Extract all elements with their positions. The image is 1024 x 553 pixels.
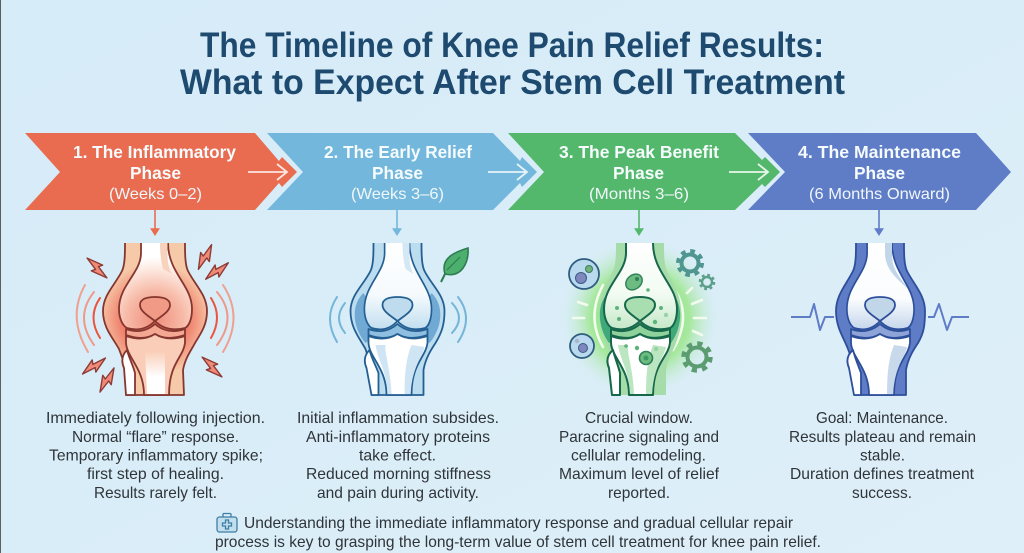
green glow	[558, 236, 722, 400]
icon: early relief knee	[330, 243, 468, 395]
text: phase 4 description: stable.	[860, 448, 905, 464]
text: phase 3 description: Paracrine signaling and	[559, 429, 719, 446]
title	[180, 26, 845, 102]
phase 1 banner: (Weeks 0–2)	[109, 186, 202, 203]
text: phase 2 description	[297, 410, 499, 502]
stem cell lower	[570, 334, 594, 358]
text: phase 4 description: Results plateau and remain	[789, 429, 976, 446]
phase 3 banner: (Months 3–6)	[589, 186, 689, 203]
text: phase 3 description: cellular remodeling.	[571, 448, 706, 464]
stable pulse lines	[791, 304, 969, 330]
text: phase 4 description	[789, 410, 976, 502]
radiance ticks	[573, 285, 706, 350]
text: phase 1 description	[46, 410, 265, 502]
title: What to Expect After Stem Cell Treatment	[180, 63, 845, 102]
text: phase 3 description: Crucial window.	[585, 410, 693, 427]
joint	[836, 243, 925, 395]
phase 4 banner	[748, 133, 1011, 210]
arrow: phase 1 to 2	[248, 164, 287, 180]
gear large teal	[678, 251, 702, 275]
lightning bolts	[79, 242, 232, 395]
arrow: phase 3 to 4	[729, 164, 768, 180]
arrow: phase 4 down	[876, 210, 882, 234]
arrow: phase 2 to 3	[488, 164, 527, 180]
text: phase 1 description: first step of healing.	[87, 466, 224, 483]
footer note: process is key to grasping the long-term value of stem cell treatment for knee pain relief.	[215, 534, 821, 551]
pain waves	[77, 285, 234, 352]
text: phase 1 description: Results rarely felt.	[94, 485, 217, 502]
text: phase 3 description	[559, 410, 720, 502]
arrow: phase 3 down	[636, 210, 642, 234]
text: phase 2 description: take effect.	[359, 448, 436, 464]
phase 2 banner: (Weeks 3–6)	[351, 186, 444, 203]
gear small	[700, 275, 714, 289]
joint	[103, 243, 207, 395]
phase 4 banner: Phase	[854, 163, 905, 183]
text: phase 2 description: and pain during activity.	[317, 485, 479, 502]
text: phase 2 description: Anti-inflammatory proteins	[306, 429, 490, 446]
gear lower green	[684, 344, 710, 370]
text: phase 4 description: Duration defines treatment	[790, 466, 975, 483]
phase 4 banner: (6 Months Onward)	[809, 186, 950, 203]
phase 1 banner: Phase	[130, 163, 181, 183]
healing cell spots	[615, 271, 668, 364]
phase 3 banner: Phase	[613, 163, 664, 183]
phase 3 banner: 3. The Peak Benefit	[559, 142, 719, 162]
icon: medical kit	[217, 514, 237, 532]
footer note: Understanding the immediate inflammatory response and gradual cellular repair	[244, 515, 794, 532]
text: phase 1 description: Immediately following injection.	[46, 410, 265, 427]
text: phase 4 description: success.	[852, 485, 912, 502]
phase 2 banner: 2. The Early Relief	[324, 142, 472, 162]
phase 1 banner: 1. The Inflammatory	[73, 142, 236, 162]
text: phase 1 description: Normal “flare” response.	[72, 429, 239, 446]
text: phase 4 description: Goal: Maintenance.	[816, 410, 948, 427]
icon: maintenance knee	[791, 243, 969, 395]
title: The Timeline of Knee Pain Relief Results:	[200, 26, 824, 65]
icon: peak benefit knee	[558, 236, 722, 400]
footer note	[215, 515, 821, 551]
phase 2 banner: Phase	[372, 163, 423, 183]
arrow: phase 1 down	[152, 210, 158, 234]
text: phase 3 description: Maximum level of relief	[559, 466, 720, 483]
phase 1 banner	[25, 133, 297, 210]
text: phase 2 description: Initial inflammation subsides.	[297, 410, 499, 427]
calming waves	[330, 297, 466, 342]
phase 3 banner	[508, 133, 780, 210]
stem cell upper	[569, 259, 599, 289]
text: phase 3 description: reported.	[608, 485, 670, 502]
leaf	[441, 248, 468, 282]
arrow: phase 2 down	[394, 210, 400, 234]
joint	[599, 243, 681, 395]
joint	[350, 243, 444, 395]
phase 4 banner: 4. The Maintenance	[798, 142, 961, 162]
text: phase 2 description: Reduced morning stiffness	[306, 466, 491, 483]
phase 2 banner	[267, 133, 537, 210]
text: phase 1 description: Temporary inflammatory spike;	[49, 448, 263, 464]
icon: inflamed knee	[77, 242, 234, 395]
